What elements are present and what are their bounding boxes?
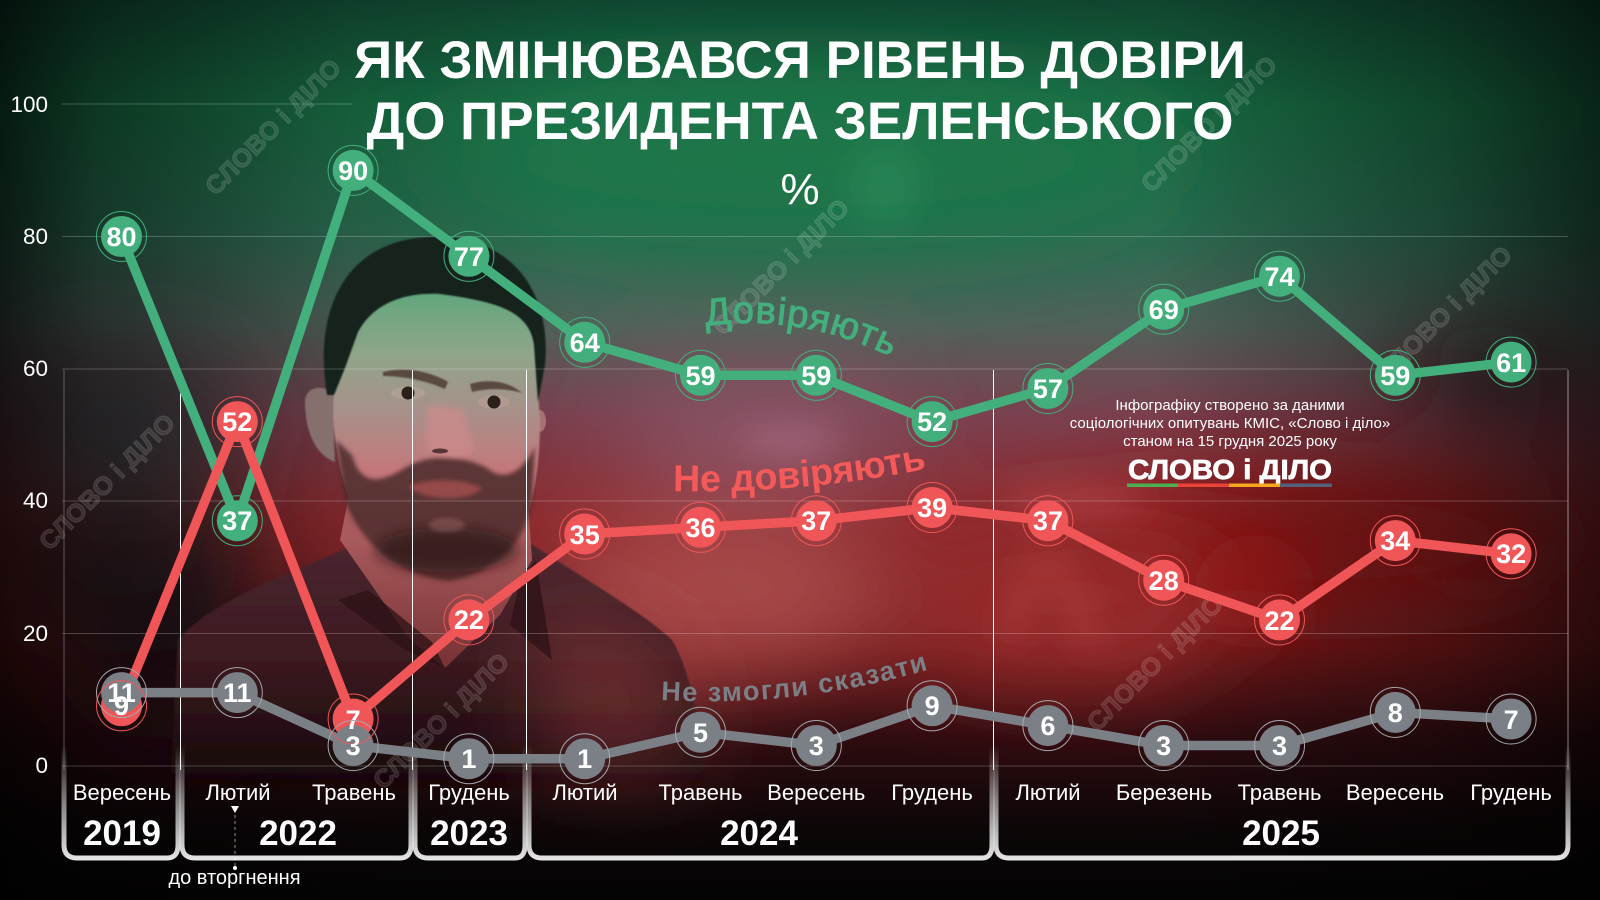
values: could not say: 1 — [577, 744, 592, 774]
month labels: Лютий — [205, 780, 271, 805]
values: distrust: 37 — [1033, 506, 1063, 536]
y axis labels: 100 — [10, 92, 48, 117]
values: could not say: 1 — [461, 744, 476, 774]
y axis labels: 20 — [23, 621, 48, 646]
values: could not say: 6 — [1040, 711, 1055, 741]
values: distrust: 32 — [1496, 539, 1526, 569]
hair — [324, 237, 546, 402]
values: trust: 37 — [222, 506, 252, 536]
vertical period dividers — [64, 370, 1568, 770]
shirt — [170, 540, 705, 790]
collar — [338, 560, 552, 668]
values: trust: 80 — [106, 222, 137, 252]
watermarks: СЛОВО і ДІЛО — [708, 194, 855, 341]
series label: trust: Довіряють — [706, 296, 893, 354]
neck — [340, 470, 532, 668]
values: could not say: 7 — [1504, 705, 1519, 735]
face — [333, 292, 540, 575]
month labels: Вересень — [73, 780, 171, 805]
line: could not say (gray) — [101, 672, 1532, 779]
nose — [426, 405, 474, 457]
source note: Інфографіку створено за даними — [1115, 397, 1345, 414]
month labels: Березень — [1116, 780, 1212, 805]
y axis labels: 60 — [23, 356, 48, 381]
watermarks: СЛОВО і ДІЛО — [1082, 590, 1229, 737]
watermarks: СЛОВО і ДІЛО — [200, 54, 347, 201]
values: trust: 90 — [338, 156, 368, 186]
title: ДО ПРЕЗИДЕНТА ЗЕЛЕНСЬКОГО — [366, 92, 1234, 151]
title — [354, 31, 1246, 151]
values: trust: 77 — [454, 242, 484, 272]
values: trust: 59 — [801, 361, 831, 391]
brows — [383, 370, 522, 393]
logo: СЛОВО і ДІЛО — [1128, 454, 1332, 485]
month labels: Грудень — [891, 780, 973, 805]
month labels: Грудень — [428, 780, 510, 805]
year labels — [83, 814, 1320, 853]
month labels: Травень — [312, 780, 396, 805]
source note: соціологічних опитувань КМІС, «Слово і діло» — [1070, 415, 1390, 432]
values: could not say: 3 — [1272, 731, 1287, 761]
year labels: 2024 — [720, 814, 798, 853]
values: could not say: 9 — [925, 691, 940, 721]
values: distrust: 39 — [917, 493, 947, 523]
year labels: 2022 — [259, 814, 337, 853]
unit percent: % — [780, 165, 820, 214]
values: distrust: 37 — [801, 506, 831, 536]
values: trust: 74 — [1264, 262, 1295, 292]
values: trust: 59 — [1380, 361, 1410, 391]
values: distrust: 34 — [1380, 526, 1410, 556]
year labels: 2019 — [83, 814, 161, 853]
values: could not say: 3 — [346, 731, 361, 761]
source note: станом на 15 грудня 2025 року — [1123, 433, 1337, 450]
year labels: 2023 — [430, 814, 508, 853]
ears — [305, 388, 335, 462]
lips — [408, 480, 482, 498]
eyes — [391, 386, 510, 408]
portrait of the president — [170, 237, 705, 790]
month labels — [73, 780, 1552, 805]
month labels: Вересень — [1346, 780, 1444, 805]
values: trust — [96, 145, 1536, 546]
y axis labels: 80 — [23, 224, 48, 249]
title: ЯК ЗМІНЮВАВСЯ РІВЕНЬ ДОВІРИ — [354, 31, 1246, 90]
values: trust: 52 — [917, 407, 947, 437]
watermarks — [34, 51, 1518, 737]
month labels: Лютий — [552, 780, 618, 805]
y axis labels: 0 — [35, 753, 48, 778]
values: distrust: 9 — [114, 691, 129, 721]
values: could not say — [96, 668, 1536, 784]
month labels: Лютий — [1015, 780, 1081, 805]
month labels: Травень — [1238, 780, 1321, 805]
values: distrust: 22 — [1264, 606, 1295, 636]
y axis labels: 40 — [23, 488, 48, 513]
values: trust: 69 — [1149, 295, 1179, 325]
values: distrust: 28 — [1149, 566, 1179, 596]
values: trust: 57 — [1033, 374, 1063, 404]
values: could not say: 11 — [223, 678, 252, 708]
line: trust (green) — [101, 150, 1532, 541]
values: trust: 64 — [570, 328, 600, 358]
values: distrust — [96, 397, 1536, 744]
series label: distrust: Не довіряють — [676, 452, 924, 498]
chin patch — [429, 518, 465, 532]
year brackets — [64, 745, 1568, 858]
chin shadow — [375, 528, 519, 572]
month labels: Травень — [659, 780, 742, 805]
horizontal grid lines — [62, 104, 1568, 766]
values: trust: 61 — [1496, 348, 1526, 378]
values: trust: 59 — [685, 361, 716, 391]
values: distrust: 52 — [222, 407, 252, 437]
year labels: 2025 — [1242, 814, 1320, 853]
line: distrust (red) — [101, 401, 1532, 740]
values: could not say: 11 — [107, 678, 136, 708]
values: could not say: 3 — [809, 731, 824, 761]
watermark over portrait: СЛОВО і ДІЛО — [368, 648, 515, 795]
watermarks: СЛОВО і ДІЛО — [1371, 241, 1518, 388]
values: could not say: 5 — [693, 718, 708, 748]
values: could not say: 8 — [1388, 698, 1403, 728]
source note — [1070, 397, 1390, 450]
invasion marker: до вторгнення — [168, 867, 301, 889]
values: distrust: 22 — [454, 605, 484, 635]
watermarks: СЛОВО і ДІЛО — [34, 409, 181, 556]
values: distrust: 7 — [346, 705, 361, 735]
watermarks: СЛОВО і ДІЛО — [1136, 51, 1283, 198]
values: distrust: 36 — [685, 513, 716, 543]
y axis labels — [10, 92, 48, 778]
series label: could not say: Не змогли сказати — [662, 656, 926, 702]
beard — [336, 440, 535, 581]
values: could not say: 3 — [1156, 731, 1171, 761]
month labels: Грудень — [1470, 780, 1552, 805]
invasion marker — [168, 806, 301, 889]
values: distrust: 35 — [570, 520, 600, 550]
month labels: Вересень — [767, 780, 865, 805]
